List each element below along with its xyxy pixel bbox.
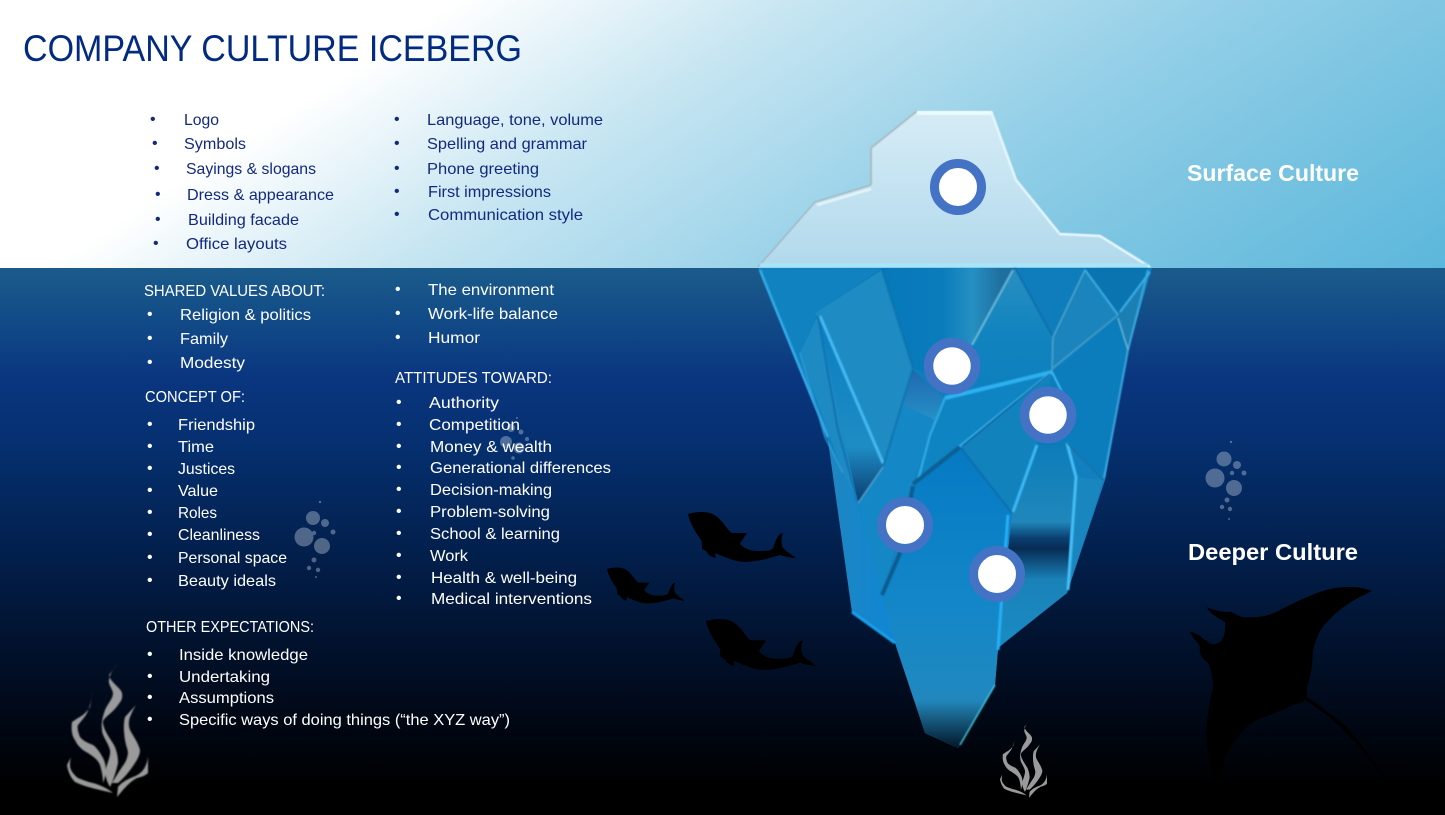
list: other expectations: • <box>147 689 153 706</box>
bubbles: behind list on the left <box>294 501 336 578</box>
list: attitudes toward: Money & wealth <box>430 439 552 456</box>
list: attitudes toward: • <box>396 438 402 455</box>
list: attitudes toward: • <box>396 503 402 520</box>
list: visible artifacts: • <box>150 111 156 128</box>
title: COMPANY CULTURE ICEBERG <box>23 28 522 69</box>
list: shared values continued: • <box>395 281 401 298</box>
list: shared values: • <box>147 354 153 371</box>
marker: deeper culture 4 <box>974 550 1020 598</box>
list: visible artifacts: Dress & appearance <box>187 187 334 204</box>
icon: seaweed near iceberg tip <box>1000 720 1047 798</box>
marker: deeper culture 1 <box>928 342 976 390</box>
list: communication: Language, tone, volume <box>427 112 603 129</box>
list: shared values: SHARED VALUES ABOUT: <box>144 283 325 300</box>
list: communication: • <box>394 183 400 200</box>
list: attitudes toward: Problem-solving <box>430 504 550 521</box>
list: attitudes toward: Generational differences <box>430 460 611 477</box>
list: attitudes toward: School & learning <box>430 526 560 543</box>
marker: deeper culture 3 <box>882 502 928 548</box>
list: concept of: Beauty ideals <box>178 573 276 590</box>
iceberg: submerged body <box>758 268 1152 748</box>
background: ocean below the waterline <box>0 268 1445 815</box>
list: visible artifacts: Sayings & slogans <box>186 161 316 178</box>
list: visible artifacts: Building facade <box>188 212 299 229</box>
list: shared values: • <box>147 306 153 323</box>
list: shared values: Religion & politics <box>180 307 311 324</box>
background: sky above the waterline <box>0 0 1445 268</box>
list: other expectations: Inside knowledge <box>179 647 308 664</box>
list: concept of: Cleanliness <box>178 527 260 544</box>
list: other expectations: • <box>147 711 153 728</box>
list: concept of: • <box>147 572 153 589</box>
list: shared values continued: The environment <box>428 282 555 299</box>
list: concept of: • <box>147 438 153 455</box>
bubbles: behind list in the middle <box>500 417 529 460</box>
list: visible artifacts: • <box>152 135 158 152</box>
list: concept of: Time <box>178 439 214 456</box>
list: attitudes toward: Decision-making <box>430 482 552 499</box>
list: other expectations: Specific ways of doing things (“the XYZ way”) <box>179 712 510 729</box>
icon: dolphin small <box>607 568 685 604</box>
marker: surface culture <box>934 164 982 210</box>
list: concept of: • <box>147 460 153 477</box>
list: concept of: Friendship <box>178 417 255 434</box>
icon: manta ray <box>1190 587 1385 797</box>
iceberg: above-water cap <box>758 111 1150 267</box>
list: communication: Phone greeting <box>427 161 539 178</box>
list: attitudes toward: Authority <box>429 395 499 412</box>
list: communication: Spelling and grammar <box>427 136 588 153</box>
list: visible artifacts: • <box>154 160 160 177</box>
bubbles: right side <box>1206 441 1246 520</box>
list: concept of: Value <box>178 483 218 500</box>
list: communication <box>394 111 603 224</box>
list: other expectations: • <box>147 668 153 685</box>
list: shared values continued <box>395 281 558 347</box>
list: attitudes toward: • <box>396 481 402 498</box>
list: attitudes toward: • <box>396 547 402 564</box>
list: concept of: Roles <box>178 505 217 522</box>
list: concept of: Personal space <box>178 550 287 567</box>
list: attitudes toward: Work <box>430 548 469 565</box>
list: visible artifacts: • <box>155 211 161 228</box>
list: attitudes toward: • <box>396 459 402 476</box>
list: communication: Communication style <box>428 207 583 224</box>
list: concept of: Justices <box>178 461 235 478</box>
list: concept of: • <box>147 482 153 499</box>
list: visible artifacts: Logo <box>184 112 219 129</box>
list: shared values <box>144 283 325 372</box>
list: attitudes toward: ATTITUDES TOWARD: <box>395 370 552 387</box>
list: communication: • <box>394 160 400 177</box>
list: concept of: • <box>147 526 153 543</box>
list: attitudes toward: Medical interventions <box>431 591 592 608</box>
list: visible artifacts: Office layouts <box>186 236 287 253</box>
list: concept of: • <box>147 416 153 433</box>
list: shared values: • <box>147 330 153 347</box>
icon: dolphin lower <box>706 619 816 670</box>
list: attitudes toward: Health & well-being <box>431 570 577 587</box>
list: visible artifacts: • <box>155 186 161 203</box>
list: concept of: • <box>147 549 153 566</box>
marker: deeper culture 2 <box>1024 392 1072 438</box>
list: attitudes toward: • <box>396 394 402 411</box>
list: attitudes toward: • <box>396 525 402 542</box>
icon: seaweed left <box>67 663 148 797</box>
iceberg <box>758 111 1152 748</box>
list: other expectations: Undertaking <box>179 669 270 686</box>
list: concept of <box>145 389 287 590</box>
list: visible artifacts: Symbols <box>184 136 246 153</box>
list: visible artifacts <box>150 111 334 253</box>
list: shared values continued: • <box>395 329 401 346</box>
list: attitudes toward: Competition <box>429 417 520 434</box>
list: communication: • <box>394 111 400 128</box>
list: shared values: Family <box>180 331 228 348</box>
list: other expectations: Assumptions <box>179 690 274 707</box>
list: shared values continued: • <box>395 305 401 322</box>
list: other expectations <box>146 619 510 729</box>
list: shared values continued: Work-life balance <box>428 306 558 323</box>
list: attitudes toward: • <box>396 569 402 586</box>
list: attitudes toward: • <box>396 416 402 433</box>
list: concept of: CONCEPT OF: <box>145 389 245 406</box>
list: other expectations: • <box>147 646 153 663</box>
icon: dolphin large <box>688 512 796 562</box>
label: surface culture: Surface Culture <box>1187 160 1359 186</box>
list: communication: First impressions <box>428 184 551 201</box>
list: concept of: • <box>147 504 153 521</box>
list: communication: • <box>394 135 400 152</box>
list: shared values: Modesty <box>180 355 245 372</box>
list: visible artifacts: • <box>153 235 159 252</box>
list: communication: • <box>394 206 400 223</box>
list: other expectations: OTHER EXPECTATIONS: <box>146 619 314 636</box>
list: attitudes toward <box>395 370 611 608</box>
list: shared values continued: Humor <box>428 330 481 347</box>
list: attitudes toward: • <box>396 590 402 607</box>
label: deeper culture: Deeper Culture <box>1188 539 1358 565</box>
